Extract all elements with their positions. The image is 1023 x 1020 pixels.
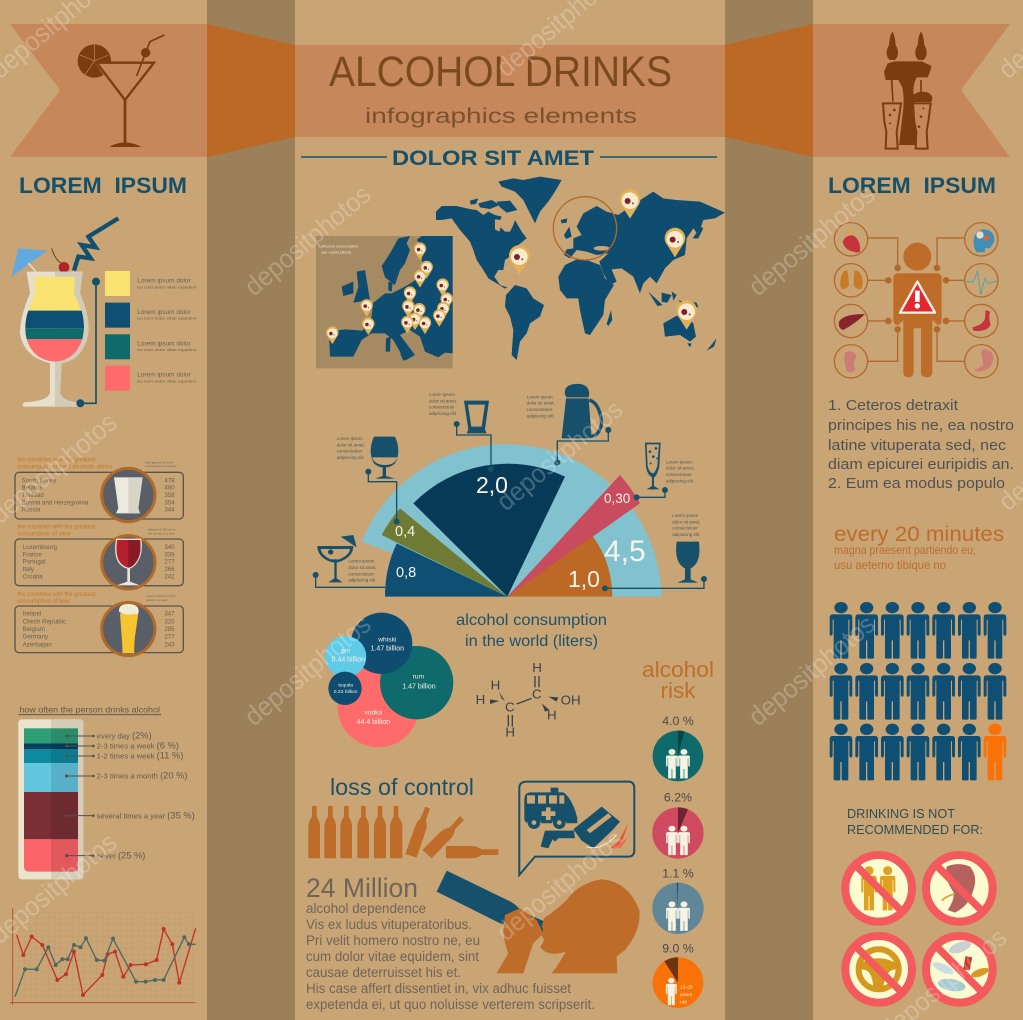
risk: 6.2 percent: [652, 791, 704, 859]
how often stacked glass chart: never (25 %): [97, 850, 145, 860]
table: wine: France: [23, 551, 42, 558]
heading: alcohol consumption in the world: in the world (liters): [465, 633, 598, 650]
layered cocktail with legend: eu cum dolor vitae equidem: [137, 378, 197, 383]
table: wine: Portugal: [23, 559, 46, 566]
table: hard alcohol: South Korea: [22, 477, 56, 484]
watermarks: depositphotos: [743, 179, 881, 302]
risk: 9.0 percent: years: [680, 992, 693, 998]
chart values: 4,5: [604, 535, 646, 568]
table: wine: 242: [164, 573, 175, 580]
sign: fetus: [926, 855, 993, 922]
table: hard alcohol: Bosnia and Herzegovina: [22, 499, 89, 506]
table: hard alcohol: on the person in a year: [145, 464, 176, 468]
table: beer: [15, 592, 183, 656]
chart callouts: dolor sit amet,: [672, 519, 700, 524]
table: beer: 285: [164, 626, 175, 633]
ethanol molecule: C: [505, 700, 515, 715]
layered cocktail with legend: eu cum dolor vitae equidem: [137, 316, 197, 321]
table: beer: Belgium: [23, 626, 45, 633]
every 20 minutes: magna praesent partiendo eu,: [834, 543, 976, 557]
heading: alcohol consumption in the world: alcohol consumption: [456, 612, 607, 629]
icon: ambulance: [524, 788, 577, 829]
chart callouts: Lorem ipsum: [672, 513, 698, 518]
table: hard alcohol: 478: [164, 477, 175, 484]
drinking head illustration: [437, 871, 640, 973]
table: beer: consumption of beer: [17, 599, 71, 605]
prohibition signs: [845, 855, 993, 1003]
bubble chart: [325, 613, 453, 747]
table: wine: 277: [164, 559, 175, 566]
table: wine: glasses of 150 ml on: [148, 528, 176, 532]
icon: beer tap and glasses: [883, 32, 932, 149]
chart values: 1,0: [568, 566, 600, 592]
chart callouts: Lorem ipsum: [666, 459, 692, 464]
bubble chart: vodka: [364, 709, 383, 716]
risk: 6.2 percent: 6.2%: [664, 791, 692, 805]
table: hard alcohol: Belarus: [22, 485, 43, 492]
heading: right lorem ipsum: LOREM IPSUM: [828, 173, 996, 198]
table: wine: Italy: [23, 566, 35, 573]
table: hard alcohol: consumption of hard alcoholic drinks: [17, 464, 112, 470]
table: hard alcohol: Trinidad: [22, 492, 44, 499]
watermarks: depositphotos: [491, 824, 629, 947]
table: hard alcohol: 460: [164, 485, 175, 492]
icon: fetus: [974, 349, 993, 372]
chart values: [395, 472, 646, 592]
sign: children: [845, 855, 912, 922]
table: wine: consumption of wine: [17, 532, 71, 538]
bubble chart: 1.47 billion: [402, 683, 436, 690]
heading: loss of control: loss of control: [330, 774, 474, 800]
numbered text block: [828, 398, 1014, 492]
table: wine: Luxembourg: [23, 544, 57, 551]
chart callouts: adipiscing elit: [672, 532, 700, 537]
chart callouts: adipiscing elit: [429, 411, 457, 416]
watermarks: depositphotos: [491, 394, 629, 517]
table: beer: Germany: [23, 634, 49, 641]
heading: alcohol risk: risk: [660, 678, 696, 703]
every 20 minutes: every 20 minutes: [834, 522, 1004, 546]
every 20 minutes: usu aeterno tibique no: [834, 558, 946, 572]
icon: liver: [839, 314, 865, 330]
alcohol risk circles: [652, 714, 704, 1008]
risk: 4.0 percent: [653, 714, 703, 781]
chart callouts: adipiscing elit: [666, 478, 694, 483]
layered cocktail with legend: Lorem ipsum dolor: [137, 341, 191, 347]
text block: 24 million: 24 Million: [306, 873, 418, 903]
chart callouts: dolor sit amet,: [527, 401, 555, 406]
heading: alcohol risk: [642, 657, 714, 703]
europe inset map: per capita (liters): [322, 249, 352, 254]
table: beer: mugs of 500 ml on the: [146, 594, 176, 598]
bubble chart: 0.44 billion: [332, 656, 365, 663]
layered cocktail with legend: eu cum dolor vitae equidem: [137, 347, 197, 352]
risk: 1.1 percent: 1.1 %: [662, 867, 694, 881]
layered cocktail with legend: Lorem ipsum dolor: [137, 310, 191, 316]
left dark band: [207, 0, 295, 1020]
ethanol molecule: H: [547, 707, 557, 722]
layered cocktail with legend: eu cum dolor vitae equidem: [137, 284, 197, 289]
chart callouts: consectetuer: [429, 405, 455, 410]
chart callouts: dolor sit amet,: [337, 442, 365, 447]
chart callouts: consectetuer: [672, 526, 698, 531]
icon: gun: [541, 831, 575, 848]
risk: 1.1 percent: [652, 867, 704, 934]
chart callouts: adipiscing elit: [527, 413, 554, 418]
text block: 24 million: Vis ex ludus vituperatoribus.: [306, 917, 472, 932]
icon: splash: [611, 823, 628, 848]
falling bottles: [308, 806, 498, 858]
chart callouts: consectetuer: [337, 449, 363, 454]
europe inset map: [316, 236, 453, 368]
not recommended heading: [847, 806, 983, 837]
numbered text block: 1. Ceteros detraxit: [828, 398, 958, 414]
risk: 9.0 percent: old: [680, 999, 687, 1005]
ethanol molecule: H: [505, 725, 515, 740]
icon: shot glass: [464, 401, 489, 433]
sign: pills: [926, 936, 993, 1003]
chart callouts: Lorem ipsum: [348, 559, 375, 564]
chart callouts: [313, 384, 707, 591]
ethanol molecule: H: [491, 677, 500, 692]
chart callouts: dolor sit amet,: [429, 398, 457, 403]
how often stacked glass chart: several times a year (35 %): [97, 810, 195, 820]
semicircle consumption chart: [313, 384, 707, 597]
icon: overturned car: [573, 807, 620, 848]
layered cocktail with legend: Lorem ipsum dolor: [137, 373, 191, 379]
chart values: 2,0: [476, 472, 508, 498]
icon: beer mug: [562, 384, 602, 438]
table: wine: 266: [164, 566, 175, 573]
icon: wine glass: [676, 542, 699, 583]
people grid: [830, 602, 1006, 780]
table: hard alcohol: shot glasses of 50 ml: [145, 460, 174, 464]
right dark band: [725, 0, 813, 1020]
table: hard alcohol: [15, 458, 183, 522]
icon: cocktail glass: [317, 535, 357, 582]
heading: left lorem ipsum: LOREM IPSUM: [19, 173, 187, 198]
table: wine: [15, 524, 183, 589]
numbered text block: 2. Eum ea modus populo: [828, 476, 1005, 492]
warning triangle: [900, 282, 935, 313]
text block: 24 million: causae deterruisset his et.: [306, 965, 461, 980]
bubble chart: gin: [341, 647, 350, 654]
table: wine: 340: [164, 544, 175, 551]
table: beer: 347: [164, 611, 175, 618]
chart callouts: adipiscing elit: [337, 455, 364, 460]
bubble chart: 1.47 billion: [371, 646, 404, 653]
table: beer: Ireland: [23, 611, 42, 618]
icon: kidney: [844, 351, 857, 373]
europe inset map: Alcohol consumption: [322, 243, 358, 248]
icon: stomach: [972, 310, 991, 331]
icon: champagne flute: [645, 443, 661, 489]
table: beer: Azerbaijan: [23, 641, 52, 648]
sign: steering wheel: [845, 936, 912, 1003]
text block: 24 million: alcohol dependence: [306, 901, 426, 916]
icon: lungs: [840, 270, 863, 289]
table: beer: 277: [164, 634, 175, 641]
bubble chart: 44.4 billion: [357, 719, 390, 726]
bubble chart: tequila: [338, 683, 353, 689]
chart callouts: Lorem ipsum: [527, 394, 553, 399]
bubble chart: rum: [413, 674, 425, 681]
country consumption tables: [15, 458, 183, 656]
numbered text block: diam epicurei euripidis an.: [828, 457, 1014, 473]
heading: alcohol consumption in the world: [456, 612, 607, 650]
table: wine: the countries with the greatest: [17, 524, 96, 530]
table: beer: 320: [164, 618, 175, 625]
bubble chart: whiski: [377, 636, 397, 643]
chart callouts: consectetuer: [527, 407, 553, 412]
table: wine: 339: [164, 551, 175, 558]
table: beer: the countries with the greatest: [17, 592, 96, 598]
ethanol molecule: H: [476, 692, 485, 707]
risk: 9.0 percent: [653, 942, 703, 1008]
how often stacked glass chart: 1-2 times a week (11 %): [97, 751, 183, 761]
table: wine: the person in a year: [148, 531, 174, 535]
table: beer: Chech Republic: [23, 618, 66, 625]
ethanol molecule: H: [532, 660, 542, 675]
chart callouts: Lorem ipsum: [429, 392, 455, 397]
layered cocktail with legend: Lorem ipsum dolor: [137, 279, 191, 285]
chart callouts: dolor sit amet,: [666, 466, 694, 471]
table: wine: Croatia: [23, 573, 43, 580]
table: hard alcohol: 344: [164, 507, 175, 514]
icon: martini glass: [78, 35, 164, 147]
heading: alcohol risk: alcohol: [642, 657, 714, 682]
icon: pulse: [965, 272, 998, 295]
not recommended heading: DRINKING IS NOT: [847, 806, 955, 821]
body organ diagram: [834, 223, 998, 378]
chart callouts: Lorem ipsum: [337, 436, 363, 441]
chart callouts: consectetuer: [666, 472, 692, 477]
ethanol molecule: [476, 660, 581, 740]
table: hard alcohol: 354: [164, 499, 175, 506]
table: beer: person in a year: [146, 598, 167, 602]
watermarks: depositphotos: [239, 609, 377, 732]
chart values: 0,4: [395, 524, 415, 540]
chart values: 0,8: [396, 565, 416, 581]
every 20 minutes: [834, 522, 1004, 572]
how often stacked glass chart: how often the person drinks alcohol: [19, 705, 160, 714]
ethanol molecule: OH: [561, 692, 581, 707]
how often stacked glass chart: [18, 705, 195, 879]
text block: 24 million: His case affert dissentiet in, vix adhuc fuisset: [306, 981, 571, 996]
text block: 24 million: expetenda ei, ut quo noluisse verterem scripserit.: [306, 997, 595, 1012]
line chart: [10, 908, 196, 1005]
chart callouts: consectetuer: [348, 571, 375, 576]
table: beer: 243: [164, 641, 175, 648]
table: hard alcohol: 358: [164, 492, 175, 499]
how often stacked glass chart: 2-3 times a week (6 %): [97, 741, 179, 751]
chart callouts: dolor sit amet,: [348, 565, 377, 570]
icon: brain head: [974, 229, 994, 252]
chart values: 0,30: [604, 491, 630, 506]
watermarks: depositphotos: [743, 609, 881, 732]
text block: 24 million: [306, 873, 595, 1012]
ethanol molecule: C: [532, 687, 542, 702]
subtitle: infographics elements: [365, 104, 637, 128]
text block: 24 million: Pri velit homero nostro ne, eu: [306, 933, 480, 948]
risk: 4.0 percent: 4.0 %: [662, 714, 694, 728]
layered cocktail with legend: [12, 218, 197, 407]
body figure: [893, 243, 942, 377]
ribbon banner: [10, 24, 1010, 157]
risk: 9.0 percent: 15-29: [680, 985, 693, 991]
how often stacked glass chart: 2-3 times a month (20 %): [97, 771, 188, 781]
icon: heart: [843, 228, 860, 252]
how often stacked glass chart: every day (2%): [97, 730, 152, 740]
heading: dolor sit amet: DOLOR SIT AMET: [392, 147, 594, 170]
icon: brandy glass: [371, 437, 398, 479]
not recommended heading: RECOMMENDED FOR:: [847, 822, 983, 837]
title: ALCOHOL DRINKS: [329, 48, 672, 96]
text block: 24 million: cum dolor vitae equidem, sint: [306, 949, 479, 964]
watermarks: depositphotos: [239, 179, 377, 302]
numbered text block: latine vituperata sed, nec: [828, 438, 1006, 454]
speech bubble with accident icons: [519, 782, 634, 875]
numbered text block: principes his ne, ea nostro: [828, 418, 1014, 434]
world map: [436, 177, 725, 360]
table: hard alcohol: Russia: [22, 507, 41, 514]
risk: 9.0 percent: 9.0 %: [662, 942, 694, 956]
table: hard alcohol: the countries with the greatest: [17, 458, 96, 464]
bubble chart: 0.23 billion: [334, 689, 358, 695]
chart callouts: adipiscing elit: [348, 578, 376, 583]
